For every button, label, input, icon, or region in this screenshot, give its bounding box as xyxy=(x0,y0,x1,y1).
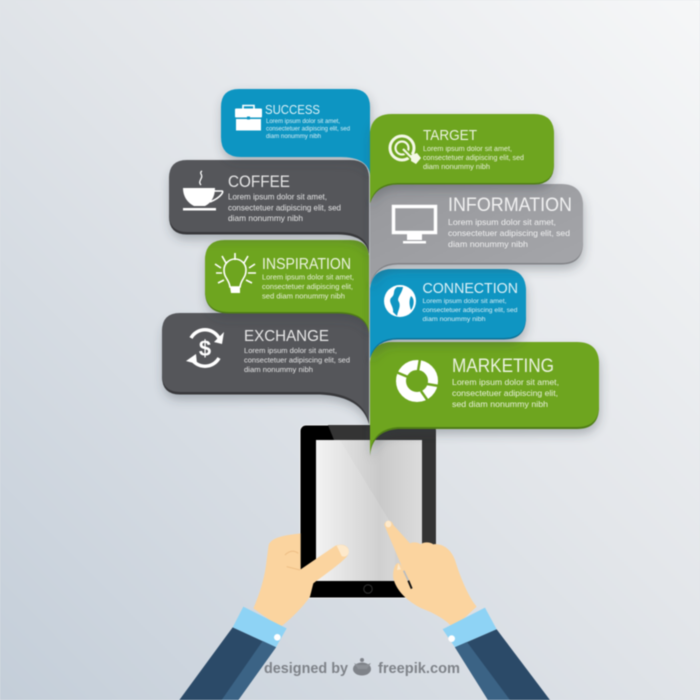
right hand xyxy=(384,521,477,628)
text: exchange xyxy=(244,346,350,374)
icon: coffee cup xyxy=(183,171,223,210)
text: marketing: sed diam nonummy nibh xyxy=(452,399,548,409)
text: coffee: consectetuer adipiscing elit, sed xyxy=(228,202,341,212)
icon: target xyxy=(390,136,421,164)
text: information: consectetuer adipiscing elit, sed xyxy=(448,228,570,238)
right cuff xyxy=(443,608,497,647)
icon: briefcase xyxy=(235,106,262,130)
text: coffee xyxy=(228,192,341,223)
text: information: diam nonummy nibh xyxy=(448,239,528,249)
left sleeve xyxy=(179,627,276,700)
text: marketing xyxy=(452,377,559,409)
icon: freepik logo xyxy=(353,658,371,676)
text: information: Lorem ipsum dolor sit amet, xyxy=(448,217,556,227)
watermark xyxy=(264,658,460,677)
icon: exchange xyxy=(186,330,224,366)
watermark: freepik.com xyxy=(378,660,460,677)
icon: exchange: $ xyxy=(199,336,211,361)
icon: light bulb xyxy=(215,253,256,293)
text: target: Lorem ipsum dolor sit amet, xyxy=(423,146,512,153)
text: connection: consectetuer adipiscing elit, sed xyxy=(422,307,518,314)
panel: success xyxy=(221,89,370,175)
left sleeve highlight xyxy=(222,641,276,700)
icon: globe xyxy=(384,285,416,317)
panel: connection xyxy=(370,269,526,358)
text: target: diam nonummy nibh xyxy=(423,164,490,171)
panel: coffee xyxy=(169,160,369,254)
heading: marketing: MARKETING xyxy=(452,356,554,377)
heading: connection: CONNECTION xyxy=(422,281,518,297)
panel: inspiration xyxy=(205,240,369,334)
text: success xyxy=(266,118,351,140)
heading: exchange: EXCHANGE xyxy=(244,328,329,345)
heading: success: SUCCESS xyxy=(265,102,320,117)
heading: information: INFORMATION xyxy=(448,195,572,216)
panel: exchange xyxy=(162,313,369,424)
text: exchange: consectetuer adipiscing elit, sed xyxy=(244,356,350,364)
left hand xyxy=(179,533,349,700)
left cuff xyxy=(233,607,287,647)
text: success: Lorem ipsum dolor sit amet, xyxy=(266,118,340,125)
text: connection xyxy=(422,298,518,323)
right sleeve and cuff xyxy=(443,608,550,700)
left cuff button xyxy=(274,634,281,641)
text: target xyxy=(423,146,524,171)
right cuff button xyxy=(448,635,455,642)
panel: information xyxy=(370,184,583,286)
text: success: consectetuer adipiscing elit, sed xyxy=(266,126,351,132)
text: information xyxy=(448,217,570,249)
text: exchange: diam nonummy nibh xyxy=(244,365,313,374)
icon: donut chart xyxy=(396,359,439,401)
tablet xyxy=(300,425,436,598)
right sleeve xyxy=(455,629,550,700)
text: coffee: Lorem ipsum dolor sit amet, xyxy=(228,192,327,202)
text: connection: Lorem ipsum dolor sit amet, xyxy=(422,298,507,305)
text: marketing: consectetuer adipiscing elit, xyxy=(452,388,558,398)
icon: monitor xyxy=(394,206,436,244)
heading: coffee: COFFEE xyxy=(228,172,290,191)
panel: marketing xyxy=(370,342,599,456)
text: exchange: Lorem ipsum dolor sit amet, xyxy=(244,346,337,355)
text: coffee: diam nonummy nibh xyxy=(228,213,303,223)
right sleeve highlight xyxy=(455,642,510,700)
watermark: designed by xyxy=(264,660,349,677)
text: success: diam nonummy nibh xyxy=(266,133,322,140)
text: connection: diam nonummy nibh xyxy=(422,316,486,323)
heading: inspiration: INSPIRATION xyxy=(262,256,351,273)
text: inspiration: sed diam nonummy nibh xyxy=(262,292,345,300)
text: marketing: Lorem ipsum dolor sit amet, xyxy=(452,377,559,387)
panel: target xyxy=(370,114,554,204)
text: target: consectetuer adipiscing elit, sed xyxy=(423,155,524,162)
heading: target: TARGET xyxy=(423,127,477,144)
text: inspiration xyxy=(262,272,354,300)
text: inspiration: consectetuer adipiscing elit, xyxy=(262,282,353,291)
text: inspiration: Lorem ipsum dolor sit amet, xyxy=(262,272,354,282)
